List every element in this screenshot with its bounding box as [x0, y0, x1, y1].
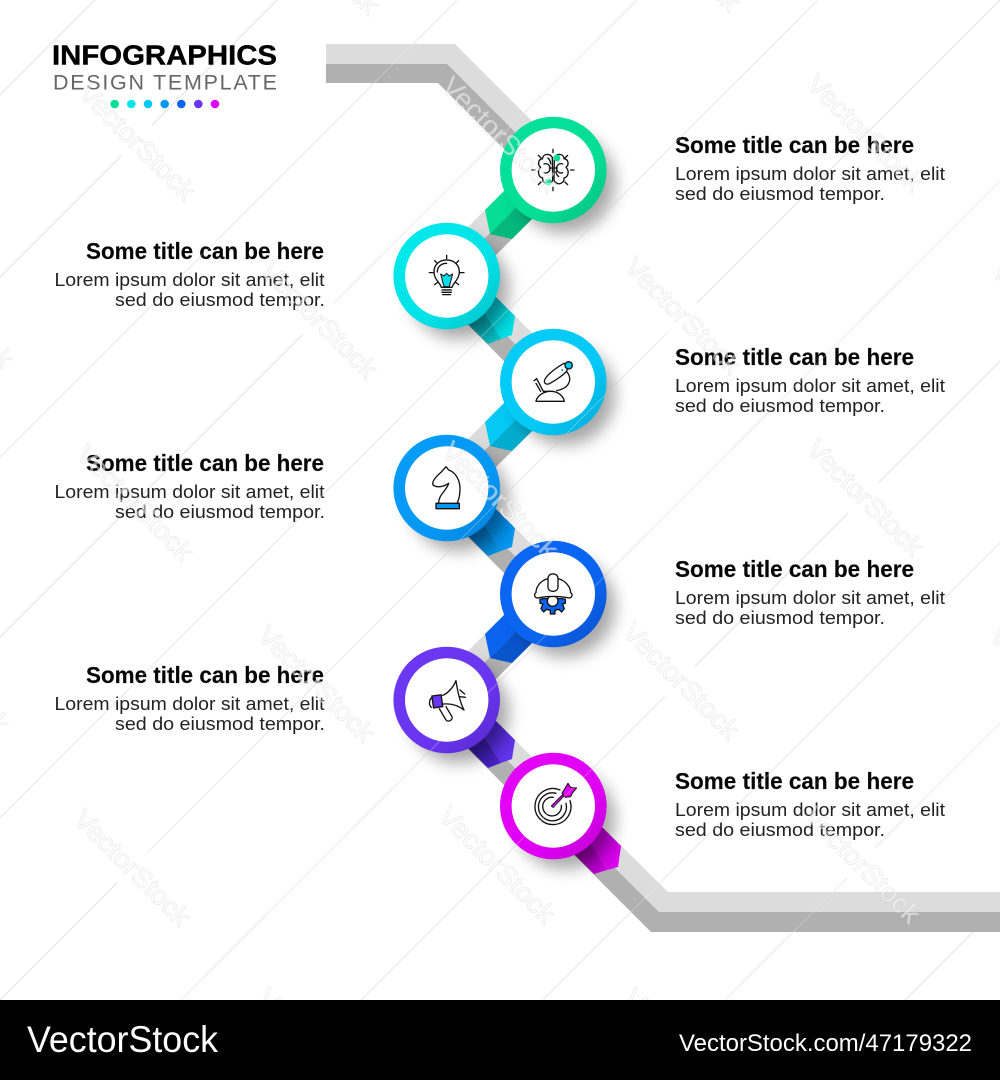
text block 7: sed do eiusmod tempor. [675, 820, 885, 840]
text block 5: Some title can be here [675, 556, 914, 582]
step 6 circle: megaphone [393, 647, 509, 763]
text block 5 [675, 556, 945, 628]
icon: megaphone [430, 681, 465, 721]
grey ribbon path [326, 44, 1000, 932]
watermarks: VectorStock [252, 620, 381, 749]
text block 3: Lorem ipsum dolor sit amet, elit [675, 376, 945, 396]
step 5 circle: helmet and gear [500, 541, 615, 657]
watermarks: VectorStock [617, 617, 746, 746]
connector tabs [447, 162, 621, 874]
colour dots [110, 100, 219, 108]
text block 7 [675, 768, 945, 840]
step 4 circle: chess knight [393, 435, 509, 551]
text block 2: Lorem ipsum dolor sit amet, elit [54, 270, 324, 290]
text block 5: Lorem ipsum dolor sit amet, elit [675, 588, 945, 608]
text block 4: sed do eiusmod tempor. [115, 502, 325, 522]
icon: target [535, 783, 577, 825]
watermarks: VectorStock [801, 69, 930, 198]
text block 6: sed do eiusmod tempor. [115, 714, 325, 734]
text block 4 [54, 450, 325, 522]
step 7 circle: target [500, 753, 615, 869]
header title block: INFOGRAPHICS [52, 40, 277, 70]
watermarks: VectorStock [619, 252, 748, 381]
text block 1: sed do eiusmod tempor. [675, 184, 885, 204]
text block 2 [54, 238, 325, 310]
text block 7: Lorem ipsum dolor sit amet, elit [675, 800, 945, 820]
subtitle: DESIGN TEMPLATE [53, 70, 277, 94]
icon: brain [532, 149, 574, 191]
watermarks: VectorStock [433, 801, 562, 930]
header title block [52, 40, 277, 108]
icon: helmet and gear [535, 574, 572, 614]
step 3 circle: microscope [500, 329, 615, 445]
text block 5: sed do eiusmod tempor. [675, 608, 885, 628]
watermarks: VectorStock [436, 71, 565, 200]
footer logo text: VectorStock [27, 1019, 218, 1060]
watermarks: VectorStock [436, 436, 565, 565]
watermarks: VectorStock [71, 439, 200, 568]
text block 3: sed do eiusmod tempor. [675, 396, 885, 416]
icon: chess knight [433, 467, 460, 509]
watermarks: VectorStock [801, 434, 930, 563]
text block 3: Some title can be here [675, 344, 914, 370]
footer bar [0, 1000, 1000, 1080]
watermarks: VectorStock [68, 804, 197, 933]
text block 2: sed do eiusmod tempor. [115, 290, 325, 310]
watermarks: VectorStock [255, 256, 384, 385]
watermarks: VectorStock [798, 801, 927, 930]
text block 1 [675, 132, 945, 204]
text block 1: Lorem ipsum dolor sit amet, elit [675, 164, 945, 184]
text block 1: Some title can be here [675, 132, 914, 158]
text block 4: Some title can be here [86, 450, 324, 476]
watermarks: VectorStock [73, 78, 202, 207]
text block 6: Some title can be here [86, 662, 324, 688]
text block 4: Lorem ipsum dolor sit amet, elit [54, 482, 324, 502]
text block 7: Some title can be here [675, 768, 914, 794]
icon: microscope [534, 362, 572, 401]
text block 3 [675, 344, 945, 416]
text block 6 [54, 662, 325, 734]
footer image id: VectorStock.com/47179322 [679, 1030, 972, 1057]
text block 6: Lorem ipsum dolor sit amet, elit [54, 694, 324, 714]
text block 2: Some title can be here [86, 238, 324, 264]
step 1 circle: brain [500, 117, 615, 233]
icon: light bulb [429, 255, 464, 295]
step 2 circle: light bulb [393, 223, 509, 339]
